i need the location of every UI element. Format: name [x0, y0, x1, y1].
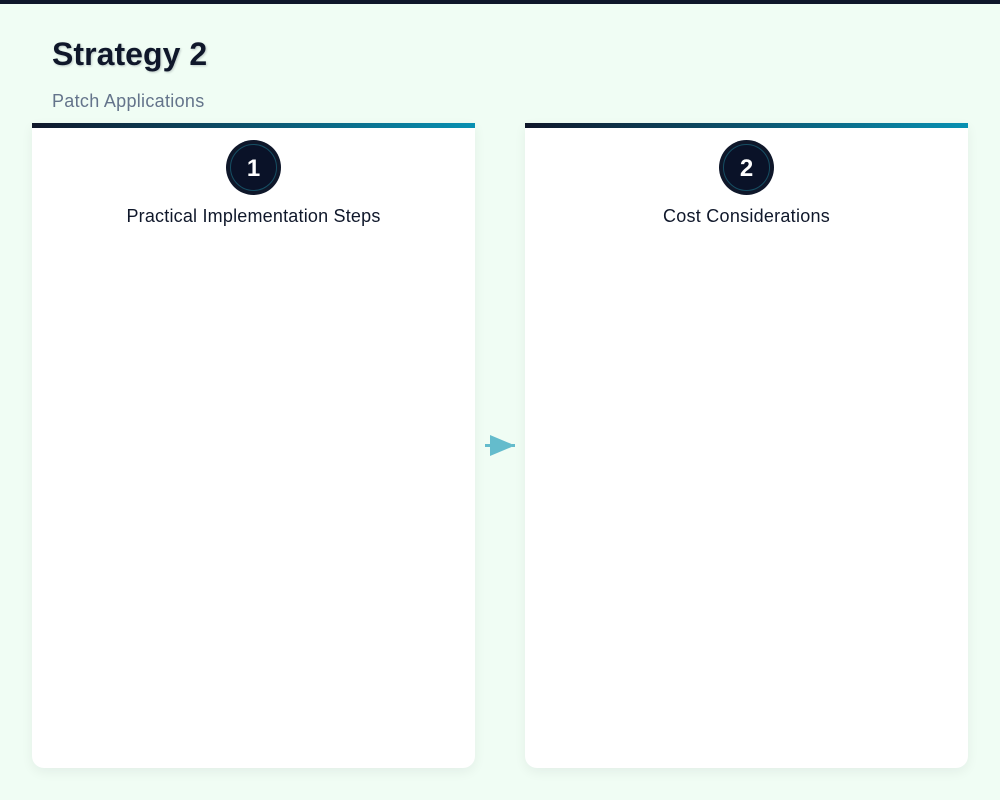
subtitle: Patch Applications: [52, 91, 204, 111]
icon: number badge 1: [226, 140, 281, 195]
panel 2 accent bar: [525, 123, 968, 128]
panel: practical implementation steps: [32, 123, 475, 768]
panel 1 heading: Practical Implementation Steps: [126, 206, 381, 226]
icon: number badge 1: 1: [247, 155, 260, 182]
icon: number badge 2: [719, 140, 774, 195]
panel 2 heading: Cost Considerations: [663, 206, 830, 226]
top bar: [0, 0, 1000, 4]
title: Strategy 2: [52, 36, 207, 72]
panel: cost considerations: [525, 123, 968, 768]
arrow between panels: [485, 435, 515, 456]
panel 1 accent bar: [32, 123, 475, 128]
icon: number badge 2: 2: [740, 155, 753, 182]
